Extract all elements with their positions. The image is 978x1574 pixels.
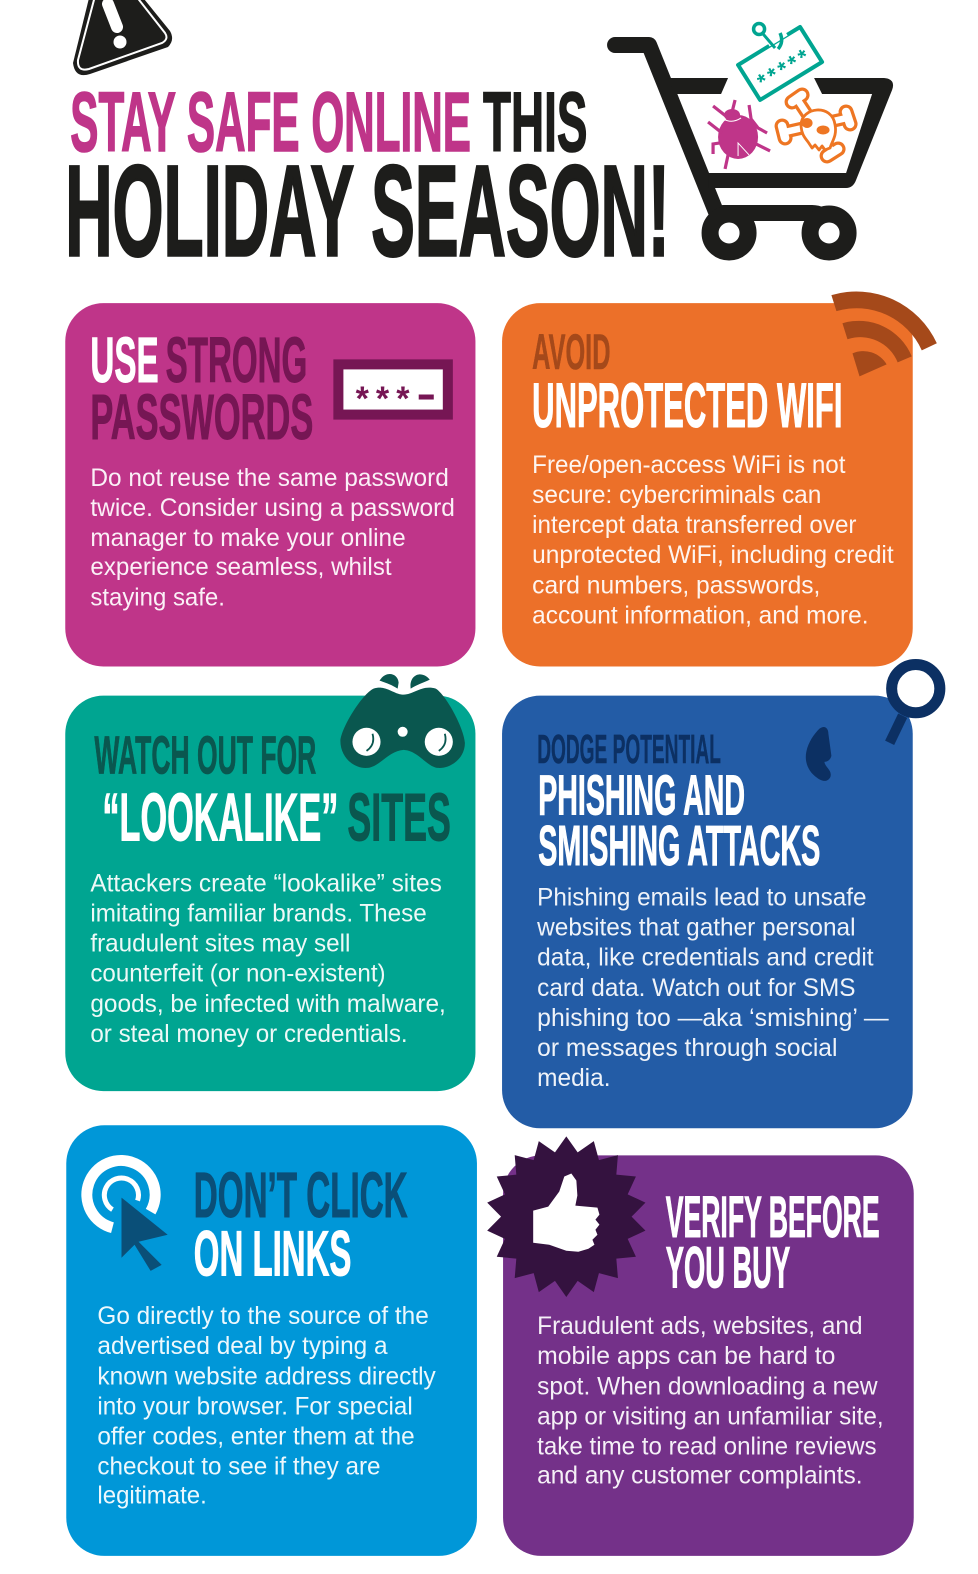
text: phishing body: Phishing emails lead to unsafe [537, 883, 867, 911]
panel: avoid unprotected wifi [502, 292, 937, 667]
title: STAY SAFE ONLINE [70, 75, 471, 169]
icon: binoculars [340, 674, 465, 768]
text: passwords body: Do not reuse the same password [90, 464, 449, 492]
text: wifi body: unprotected WiFi, including credit [532, 541, 894, 569]
text: wifi body: card numbers, passwords, [532, 571, 820, 599]
heading: lookalike sites [94, 725, 451, 856]
icon: warning triangle [73, 0, 172, 75]
text: phishing body: card data. Watch out for SMS [537, 974, 855, 1002]
heading: avoid unprotected wifi: AVOID [532, 324, 610, 380]
text: passwords body: staying safe. [90, 583, 225, 611]
text: phishing body: websites that gather personal [536, 914, 855, 942]
text: links body: offer codes, enter them at the [97, 1423, 415, 1451]
text: passwords body [90, 464, 455, 611]
icon: cursor click [87, 1161, 168, 1271]
text: phishing body: data, like credentials and credit [537, 944, 874, 972]
text: links body: known website address directly [97, 1362, 436, 1390]
text: lookalike body: Attackers create “lookalike” sites [90, 869, 442, 897]
heading: lookalike sites: SITES [347, 781, 451, 856]
heading: don't click on links: ON LINKS [194, 1217, 351, 1289]
title: THIS [483, 75, 587, 169]
text: passwords body: manager to make your online [90, 524, 406, 552]
icon: magnifying glass [890, 665, 940, 743]
text: wifi body: Free/open-access WiFi is not [532, 451, 845, 479]
heading: avoid unprotected wifi [532, 324, 842, 441]
text: lookalike body: imitating familiar brands. These [90, 900, 427, 928]
icon: wifi [831, 292, 937, 376]
text: links body: into your browser. For special [97, 1392, 413, 1420]
panel: lookalike sites [65, 674, 475, 1091]
text: wifi body [532, 451, 894, 629]
heading: lookalike sites: “LOOKALIKE” [102, 781, 338, 856]
text: links body: legitimate. [97, 1482, 207, 1510]
icon: password tag: ***** [753, 42, 817, 94]
panel: phishing and smishing [502, 665, 940, 1128]
text: links body: checkout to see if they are [97, 1453, 381, 1481]
text: links body: Go directly to the source of the [97, 1302, 429, 1330]
heading: use strong passwords: USE [90, 324, 159, 396]
icon: skull and crossbones [782, 95, 850, 156]
text: phishing body [536, 883, 890, 1092]
text: passwords body: twice. Consider using a password [90, 494, 455, 522]
icon: password tag [738, 23, 822, 100]
heading: phishing and smishing: DODGE POTENTIAL [537, 726, 721, 772]
text: phishing body: media. [537, 1064, 610, 1092]
text: links body: advertised deal by typing a [97, 1332, 388, 1360]
text: verify body: mobile apps can be hard to [537, 1342, 835, 1370]
title [65, 75, 670, 283]
icon: password field: *** [356, 380, 417, 418]
text: lookalike body: or steal money or credentials. [90, 1020, 408, 1048]
text: passwords body: experience seamless, whilst [90, 553, 392, 581]
text: lookalike body: fraudulent sites may sell [90, 930, 350, 958]
text: links body [97, 1302, 436, 1510]
heading: phishing and smishing: PHISHING AND [538, 764, 745, 827]
text: verify body: Fraudulent ads, websites, and [537, 1312, 863, 1340]
panel: verify before you buy [487, 1136, 914, 1556]
icon: password field [333, 359, 453, 420]
icon: fish hook [806, 727, 831, 781]
panel: use strong passwords [65, 303, 475, 667]
heading: lookalike sites: WATCH OUT FOR [94, 725, 316, 785]
text: wifi body: secure: cybercriminals can [532, 481, 821, 509]
icon: shopping cart [615, 23, 893, 252]
heading: verify before you buy [666, 1185, 880, 1300]
panel: don't click on links [66, 1125, 477, 1556]
heading: use strong passwords: STRONG [166, 324, 307, 396]
text: verify body [537, 1312, 884, 1490]
text: wifi body: intercept data transferred over [532, 511, 857, 539]
text: lookalike body [90, 869, 446, 1048]
heading: verify before you buy: YOU BUY [666, 1235, 790, 1300]
heading: use strong passwords: PASSWORDS [90, 381, 313, 453]
heading: phishing and smishing [537, 726, 820, 877]
text: phishing body: phishing too —aka ‘smishing’ — [537, 1004, 890, 1032]
heading: don't click on links [194, 1159, 408, 1289]
text: verify body: and any customer complaints. [537, 1462, 863, 1490]
text: wifi body: account information, and more. [532, 601, 869, 629]
text: phishing body: or messages through social [537, 1034, 837, 1062]
text: lookalike body: goods, be infected with malware, [90, 990, 446, 1018]
text: verify body: take time to read online reviews [537, 1433, 877, 1461]
text: verify body: spot. When downloading a new [537, 1372, 878, 1400]
icon: bug [708, 100, 770, 169]
heading: use strong passwords [90, 324, 313, 453]
text: verify body: app or visiting an unfamiliar site, [537, 1402, 884, 1430]
heading: don't click on links: DON’T CLICK [194, 1159, 408, 1231]
icon: thumbs up badge [487, 1136, 645, 1297]
text: lookalike body: counterfeit (or non-existent) [90, 960, 386, 988]
